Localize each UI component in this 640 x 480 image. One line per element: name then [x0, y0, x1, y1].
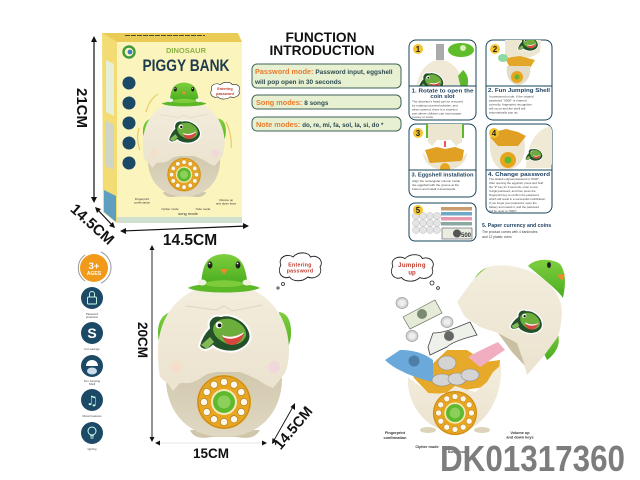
- feature icon: lighting: [81, 422, 103, 451]
- age badge 3+: [78, 252, 111, 283]
- box speech bubble: Entering: [217, 87, 233, 91]
- banknotes picture: 500: [461, 233, 472, 239]
- step 1 panel: money or coins.: [412, 115, 434, 119]
- box brand logo: [124, 46, 134, 58]
- step 3 illustration: 3: [416, 129, 421, 138]
- step 2 panel: [486, 37, 552, 120]
- dimension: egg height 20CM: 20CM: [135, 322, 150, 358]
- step 1 panel: 1. Rotate to open the: [412, 88, 474, 94]
- step 5 panel: 5: [416, 206, 421, 215]
- step 1 illustration: 1: [416, 45, 421, 54]
- step 1 panel: [409, 40, 476, 124]
- step 4 illustration: 4: [492, 129, 497, 138]
- step 5 panel: [409, 203, 476, 241]
- step 1 panel: by rotating counterclockwise, and: [412, 104, 458, 108]
- dimension: egg depth 14.5CM: 14.5CM: [271, 404, 316, 453]
- pink banknote: [468, 342, 505, 367]
- feature icon: password protection: protection: [86, 315, 99, 319]
- step 5 caption: 5. Paper currency and coins: [482, 223, 551, 229]
- step 3 panel: [409, 124, 476, 197]
- step 4 panel: which will result in a successful modification.: [489, 197, 546, 201]
- feature icon: fun jumping shell: Fun Jumping: [84, 379, 101, 383]
- step 1 panel: coin slot: [430, 94, 455, 100]
- step 4 panel: [486, 124, 552, 213]
- age badge 3+: 3+: [89, 261, 100, 272]
- opened egg: speech bubble jumping up: Jumping: [398, 263, 426, 269]
- feature icon: fun jumping shell: [81, 355, 103, 386]
- box captions: Volume up: [219, 198, 233, 202]
- step 4 panel: 4. Change password: [488, 172, 550, 178]
- opened egg captions: Volume up: [510, 431, 530, 435]
- dimension: egg width 15CM: [155, 440, 267, 461]
- age badge 3+: AGES: [87, 271, 102, 277]
- blue banknote 10: [385, 350, 433, 382]
- dimension: egg height 20CM: [135, 245, 154, 442]
- step 3 panel: bottom and install it downwards.: [412, 187, 456, 191]
- feature icon: fun savings: [81, 322, 103, 351]
- box title: PIGGY BANK: [142, 57, 230, 75]
- step 2 panel: will occur and the shell will: [489, 106, 526, 110]
- heading: function introduction: [270, 29, 374, 58]
- opened egg: inner yellow core: [413, 350, 500, 395]
- function box: note modes: Note modes: do, re, mi, fa, sol, la, si, do *: [256, 120, 384, 129]
- speech bubble: entering password: Entering: [288, 262, 312, 268]
- box feature icons: [122, 76, 136, 170]
- box front: [117, 42, 242, 223]
- feature icon: password protection: Password: [86, 312, 99, 316]
- dimension: box depth 14.5CM: 14.5CM: [67, 201, 117, 249]
- speech bubble: entering password: [277, 253, 321, 289]
- feature icon: music features: [81, 389, 103, 418]
- step 2 illustration: 2: [493, 45, 498, 54]
- dimension: box width 14.5CM: [120, 223, 249, 249]
- box captions: Fingerprint: [135, 197, 149, 201]
- function box: password mode: will pop open in 30 seconds: [254, 79, 342, 86]
- feature icon: fun savings: Fun savings: [84, 347, 100, 351]
- opened egg: speech bubble jumping up: [391, 255, 439, 289]
- feature icon: music features: ♫: [86, 394, 98, 409]
- flying coins: [396, 298, 453, 342]
- feature icon: fun jumping shell: Shell: [89, 382, 95, 386]
- box title: [142, 46, 230, 75]
- step 2 panel: 2. Fun Jumping Shell: [488, 88, 550, 94]
- step 4 panel: fingerprint key to confirm the password,: [489, 193, 540, 197]
- large egg product: [158, 254, 291, 438]
- step 5 caption: The product comes with 4 banknotes: [482, 230, 538, 234]
- opened egg: dial: [433, 391, 477, 435]
- opened egg: speech bubble jumping up: up: [408, 270, 416, 276]
- box motion lines: [138, 94, 231, 150]
- opened egg captions: Song mode: [448, 450, 468, 454]
- step 5 caption: [482, 223, 551, 239]
- box egg illustration: [143, 82, 226, 197]
- step 1 panel: port where children can insert paper: [412, 112, 461, 116]
- box speech bubble: password: [216, 92, 235, 96]
- box side panel: [102, 33, 117, 223]
- flying banknotes: [385, 300, 505, 382]
- coin pile: [432, 356, 479, 386]
- box speech bubble: [211, 82, 240, 99]
- function box: song modes: Song modes: 8 songs: [256, 98, 329, 107]
- dimension: box height 21CM: 21CM: [73, 88, 90, 128]
- opened egg captions: confirmation: [384, 436, 407, 440]
- step 2 panel: automatically pop up.: [489, 110, 518, 114]
- opened egg captions: [384, 431, 534, 454]
- box captions: and down keys: [216, 202, 237, 206]
- step 3 panel: the eggshell with the groove at the: [412, 183, 459, 187]
- step 2 panel: correctly, fingerprint recognition: [489, 102, 532, 106]
- dimension: egg width 15CM: 15CM: [193, 446, 229, 461]
- opened egg captions: Fingerprint: [385, 431, 406, 435]
- step 3 panel: 3. Eggshell installation: [412, 172, 474, 178]
- dark banknote 500: [428, 322, 477, 355]
- step 5 caption: and 12 plastic coins: [482, 235, 512, 239]
- box captions: Cipher mode: [161, 207, 179, 211]
- feature icon: lighting: lighting: [88, 447, 97, 451]
- speech bubble: entering password: password: [287, 268, 313, 274]
- box captions: [134, 197, 237, 216]
- box top flap: [102, 33, 242, 42]
- step 4 panel: battery and restart it, and the password: [489, 205, 540, 209]
- step 4 panel: 4-digit password, and then press the: [489, 189, 536, 193]
- opened egg captions: Cipher mode: [415, 445, 439, 449]
- function box: note modes: [252, 117, 401, 131]
- opened egg captions: and down keys: [506, 436, 534, 440]
- coins picture: [412, 212, 440, 234]
- step 4 panel: will be reset to "0000".: [489, 209, 518, 213]
- dimension: box height 21CM: [73, 36, 97, 203]
- feature icon: fun savings: S: [87, 325, 97, 341]
- step 4 panel: The default original password is "0000".: [489, 177, 540, 181]
- step 2 panel: In password mode, if the original: [489, 94, 534, 98]
- box captions: song mode: [178, 211, 199, 216]
- heading: function introduction: FUNCTION: [286, 29, 356, 45]
- step 3 panel: Align the rectangular column inside: [412, 179, 460, 183]
- feature icon: music features: Music Features: [82, 414, 102, 418]
- step 4 panel: If you forget your password, open the: [489, 201, 537, 205]
- function box: password mode: [252, 64, 401, 88]
- box captions: confirmation: [134, 200, 150, 204]
- step 2 panel: password "0000" is entered: [489, 98, 527, 102]
- product box: [102, 33, 242, 223]
- feature icon: password protection: [81, 287, 103, 319]
- heading: function introduction: INTRODUCTION: [270, 42, 374, 58]
- dimension: box width 14.5CM: 14.5CM: [163, 232, 217, 249]
- step 4 panel: After opening the eggshell, press and hold: [489, 181, 544, 185]
- function box: password mode: Password mode: Password input, eggshell: [255, 67, 393, 76]
- box captions: Note mode: [196, 207, 211, 211]
- gray banknote 200: [403, 300, 442, 329]
- function box: song modes: [252, 95, 401, 109]
- box title: DINOSAUR: [166, 46, 207, 55]
- step 4 panel: the "#" key for 3 seconds, enter a new: [489, 185, 539, 189]
- step 1 panel: when opened, there is a insertion: [412, 108, 458, 112]
- opened egg: flying top shell: [457, 260, 565, 375]
- opened egg: lower shell: [408, 365, 501, 433]
- step 1 panel: The dinosaur's head can be removed: [412, 100, 463, 104]
